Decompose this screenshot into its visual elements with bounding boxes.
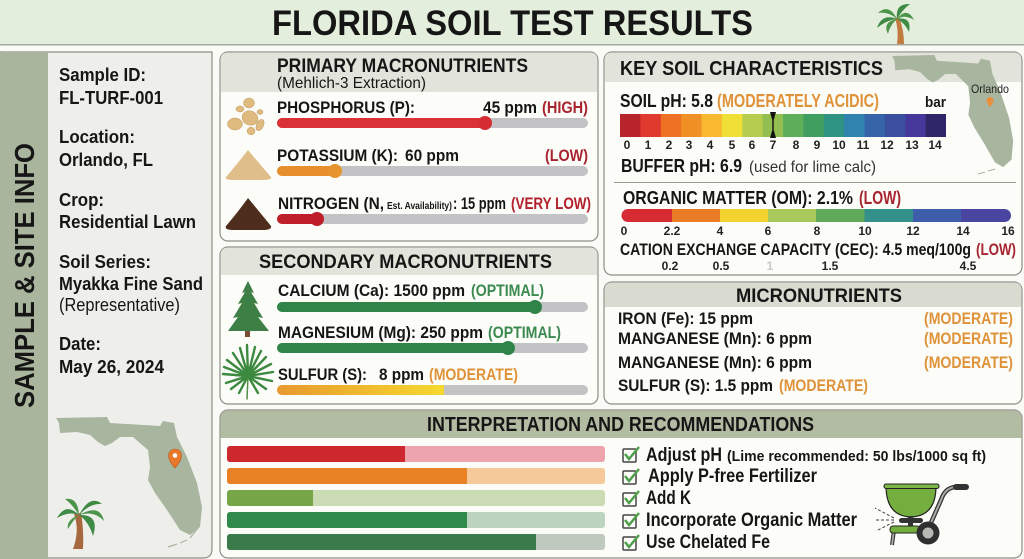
pH scale labels: 5 [729, 138, 736, 152]
bar: calcium: CALCIUM (Ca): 1500 ppm [278, 281, 465, 300]
bar: light green [227, 490, 605, 506]
sidebar band [0, 53, 48, 559]
soil series: Myakka Fine Sand [59, 273, 203, 294]
OM scale labels: 4 [717, 224, 724, 238]
bar: magnesium: MAGNESIUM (Mg): 250 ppm [278, 323, 483, 342]
CEC scale labels: 1.5 [822, 259, 839, 273]
CEC scale labels [662, 259, 977, 273]
row: manganese [618, 329, 1013, 348]
buffer pH reading: BUFFER pH: 6.9 [621, 156, 742, 176]
row: manganese repeated: MANGANESE (Mn): 6 ppm [618, 353, 812, 372]
date: Date: [59, 333, 101, 354]
heading: SECONDARY MACRONUTRIENTS [259, 252, 552, 273]
subheading: (Mehlich-3 Extraction) [277, 75, 426, 92]
OM scale labels: 6 [765, 224, 772, 238]
soil series: (Representative) [59, 294, 180, 315]
bar: green [227, 512, 605, 528]
crop [59, 189, 196, 232]
pH scale labels: 6 [749, 138, 756, 152]
panel: interpretation and recommendations [220, 410, 1022, 558]
recommendation: organic matter: Incorporate Organic Matter [646, 510, 858, 531]
heading: MICRONUTRIENTS [736, 286, 902, 307]
pH scale labels: 4 [707, 138, 714, 152]
pH scale labels: 0 [624, 138, 631, 152]
bar: red [227, 446, 605, 462]
bar: magnesium [277, 323, 588, 355]
header band [221, 248, 597, 275]
CEC scale labels: 0.5 [713, 259, 730, 273]
recommendation: chelated iron: Use Chelated Fe [646, 532, 770, 553]
pH scale labels: 1 [645, 138, 652, 152]
panel: key soil characteristics [604, 52, 1022, 275]
pH scale labels: 8 [793, 138, 800, 152]
title: FLORIDA SOIL TEST RESULTS [272, 4, 753, 43]
bar: sulfur [277, 365, 588, 395]
OM scale labels: 0 [621, 224, 628, 238]
chart: organic matter scale [621, 209, 1015, 238]
row: manganese repeated [618, 353, 1013, 372]
bar: potassium [277, 146, 588, 178]
heading: PRIMARY MACRONUTRIENTS [277, 56, 528, 77]
pH scale labels: 9 [814, 138, 821, 152]
recommendation: add K [623, 488, 691, 509]
sidebar heading: SAMPLE & SITE INFO [9, 143, 40, 408]
CEC scale labels: 4.5 [960, 259, 977, 273]
bar: dark green [227, 534, 605, 550]
bar: phosphorus: (HIGH) [542, 98, 588, 117]
CEC scale labels: 1 [767, 259, 774, 273]
pH scale labels: 10 [832, 138, 846, 152]
panel: secondary macronutrients [220, 247, 598, 404]
header band [221, 53, 597, 92]
row: manganese: MANGANESE (Mn): 6 ppm [618, 329, 812, 348]
icon: palm tree in header [877, 4, 914, 44]
OM scale labels: 16 [1001, 224, 1015, 238]
date: May 26, 2024 [59, 356, 165, 377]
bar: phosphorus [277, 98, 588, 130]
crop: Crop: [59, 189, 104, 210]
sample id [59, 64, 163, 108]
icon: fertilizer spreader [875, 484, 969, 545]
panel: primary macronutrients [220, 52, 598, 241]
header band [605, 53, 1021, 82]
soil pH reading: SOIL pH: 5.8 [620, 91, 713, 111]
OM scale labels [621, 224, 1015, 238]
sample id: FL-TURF-001 [59, 87, 163, 108]
icon: nitrogen soil pile [226, 198, 271, 230]
OM scale labels: 14 [956, 224, 970, 238]
bar: calcium: (OPTIMAL) [471, 281, 544, 300]
pH marker [770, 112, 776, 138]
icon: phosphorus granules [228, 98, 266, 135]
OM scale labels: 12 [906, 224, 920, 238]
recommendation: add K: Add K [646, 488, 691, 509]
pH scale labels: 7 [770, 138, 777, 152]
CEC scale labels: 0.2 [662, 259, 679, 273]
bar: orange [227, 468, 605, 484]
bar: phosphorus: PHOSPHORUS (P): [277, 98, 415, 117]
soil pH reading [620, 91, 946, 111]
pH scale labels: 14 [928, 138, 942, 152]
header band [0, 0, 1024, 46]
bar: magnesium: (OPTIMAL) [488, 323, 561, 342]
map: Florida with Orlando marker: Orlando [971, 82, 1009, 96]
recommendation: adjust pH: Adjust pH [646, 445, 722, 466]
heading: KEY SOIL CHARACTERISTICS [620, 58, 883, 80]
location [59, 126, 153, 170]
icon: pine tree [228, 281, 269, 337]
bar: potassium: POTASSIUM (K): [277, 146, 398, 165]
map: Florida with Orlando pin [56, 417, 202, 547]
pH scale labels: 3 [686, 138, 693, 152]
row: iron: IRON (Fe): 15 ppm [618, 309, 753, 328]
recommendation: adjust pH [623, 445, 986, 466]
bar: sulfur: SULFUR (S): [278, 365, 367, 384]
bar: potassium: 60 ppm [405, 146, 459, 165]
row: iron [618, 309, 1013, 328]
panel: micronutrients [604, 282, 1022, 404]
recommendation: apply fertilizer: Apply P-free Fertilizer [648, 466, 818, 487]
sample id: Sample ID: [59, 64, 146, 85]
pH scale labels: 13 [905, 138, 919, 152]
icon: palmetto frond [223, 345, 273, 399]
row: sulfur [618, 376, 868, 395]
soil series [59, 251, 203, 315]
bar: sulfur: (MODERATE) [429, 365, 518, 384]
row: sulfur: (MODERATE) [779, 376, 868, 395]
recommendation: adjust pH: (Lime recommended: 50 lbs/1000 sq ft) [727, 448, 986, 465]
heading: INTERPRETATION AND RECOMMENDATIONS [427, 414, 814, 436]
header band [605, 283, 1021, 307]
organic matter reading: (LOW) [859, 188, 901, 208]
soil pH reading: bar [925, 94, 946, 111]
bar: nitrogen [277, 194, 591, 226]
location: Orlando, FL [59, 149, 153, 170]
chart: pH scale [620, 112, 946, 152]
pH scale labels [624, 138, 942, 152]
bar: nitrogen: Est. Availability) [387, 201, 452, 212]
location: Location: [59, 126, 135, 147]
icon: potassium sand pile [226, 150, 271, 180]
bar: nitrogen: (VERY LOW) [511, 194, 591, 213]
bar: nitrogen: NITROGEN (N, [278, 194, 384, 213]
OM scale labels: 10 [858, 224, 872, 238]
buffer pH reading: (used for lime calc) [749, 159, 876, 176]
row: sulfur: SULFUR (S): 1.5 ppm [618, 376, 773, 395]
pH scale labels: 2 [666, 138, 673, 152]
bar: potassium: (LOW) [545, 146, 588, 165]
header band [221, 411, 1021, 438]
map: Florida with Orlando marker [892, 55, 1013, 174]
pH scale labels: 12 [880, 138, 894, 152]
OM scale labels: 8 [814, 224, 821, 238]
organic matter reading: ORGANIC MATTER (OM): 2.1% [623, 188, 853, 208]
soil series: Soil Series: [59, 251, 151, 272]
crop: Residential Lawn [59, 211, 196, 232]
OM scale labels: 2.2 [664, 224, 681, 238]
bar: nitrogen: : 15 ppm [453, 194, 506, 213]
bar: phosphorus: 45 ppm [483, 98, 537, 117]
panel: sample and site info [0, 52, 212, 559]
date [59, 333, 165, 377]
icon: palm tree [57, 499, 104, 549]
soil pH reading: (MODERATELY ACIDIC) [717, 91, 879, 111]
pH scale labels: 11 [857, 138, 870, 152]
buffer pH reading [621, 156, 876, 176]
bar: calcium [277, 281, 588, 314]
bar: sulfur: 8 ppm [379, 365, 424, 384]
